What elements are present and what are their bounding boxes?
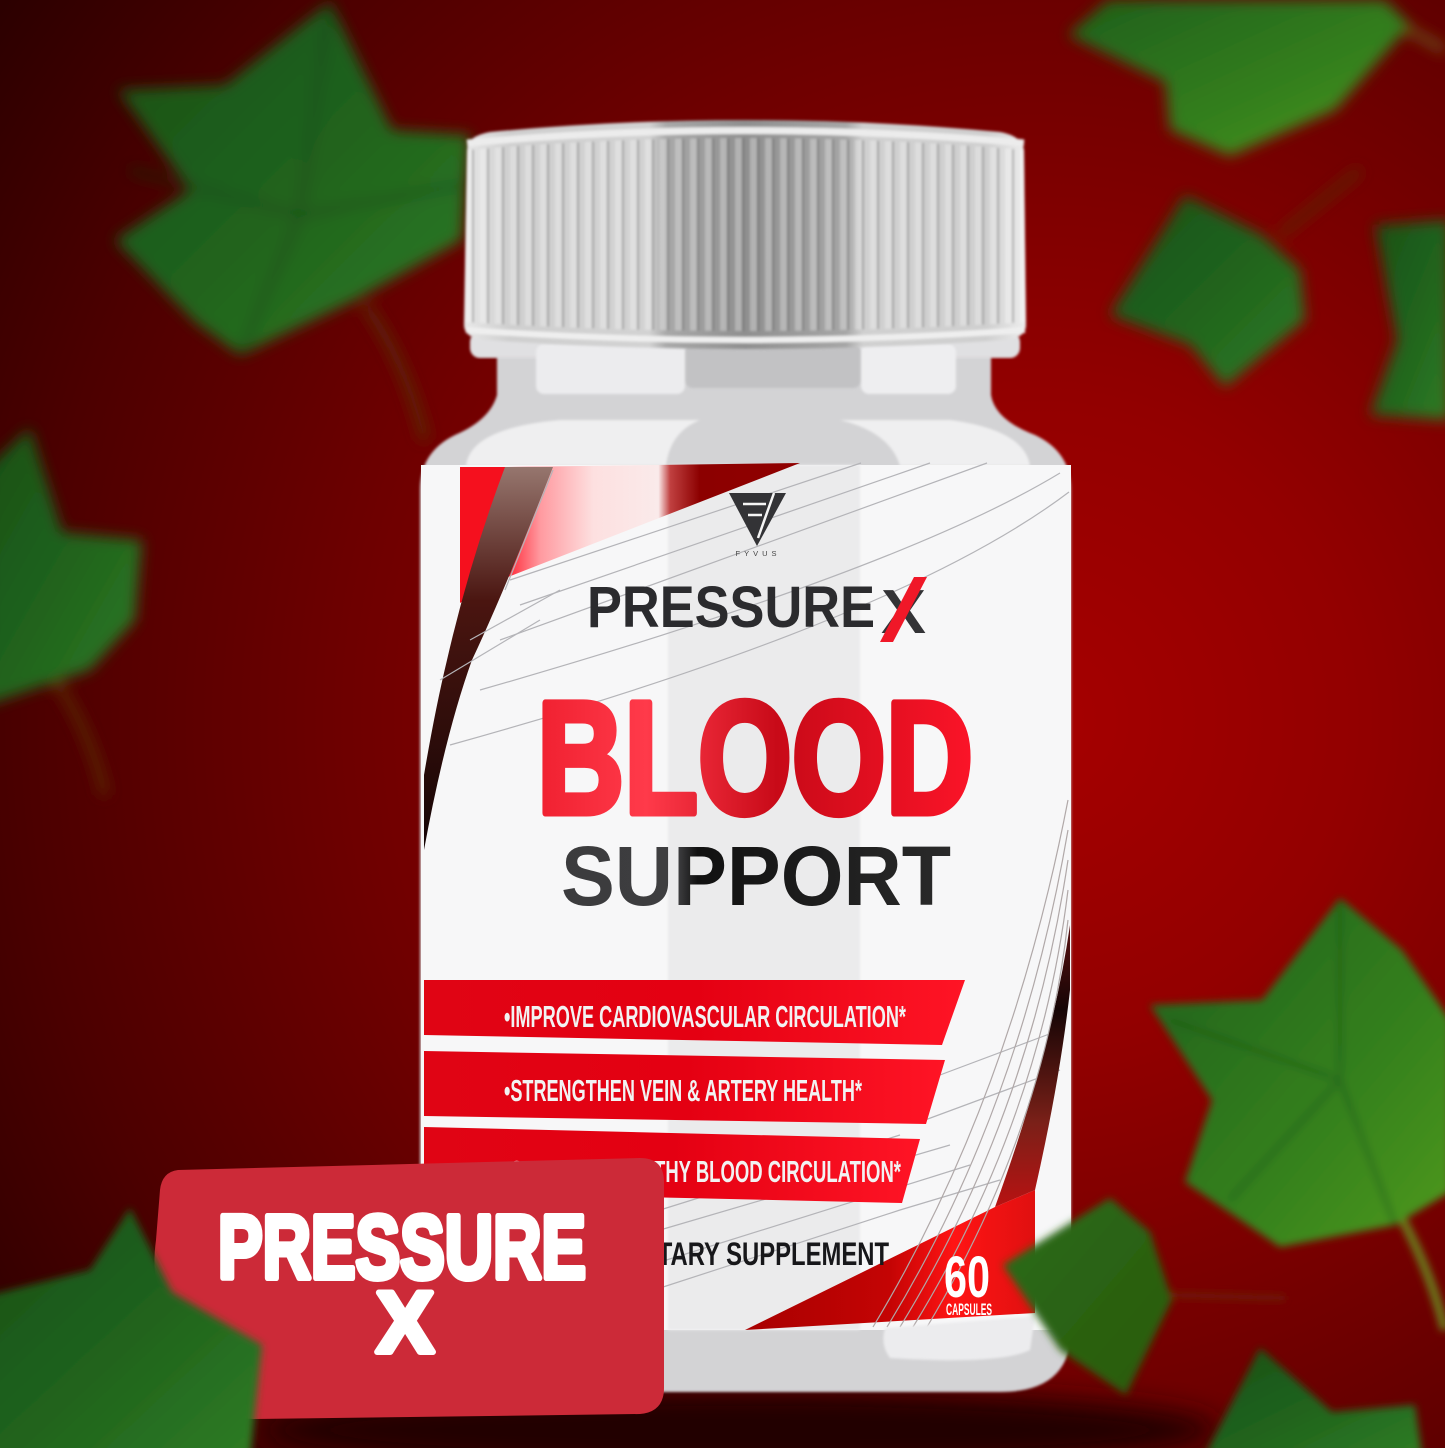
label top sheen wedge: [505, 463, 800, 577]
headline: blood: BLOOD: [537, 668, 973, 847]
leaf: bottom left: [0, 1208, 262, 1448]
brand name: PRESSURE: [587, 575, 875, 640]
dietary supplement line: DIETARY SUPPLEMENT: [618, 1236, 889, 1272]
shoulder highlights: [466, 420, 1030, 466]
neck highlights: [536, 344, 956, 394]
base highlight: [883, 1316, 1035, 1360]
leaf: bottom centre: [1003, 1198, 1285, 1395]
benefit bar 3: •SUPPORT HEALTHY BLOOD CIRCULATION*: [504, 1154, 902, 1189]
bottle: [420, 120, 1071, 1392]
bottle floor shadow: [260, 1390, 1220, 1448]
leaf: upper right: [1110, 170, 1360, 387]
sticker title line 2: X: [376, 1275, 434, 1371]
benefit bar 2: [424, 1051, 945, 1124]
label background: [421, 465, 1071, 1330]
label centre sheen: [668, 465, 860, 1330]
capsule count: 60: [944, 1245, 990, 1310]
bottle body: [420, 355, 1071, 1392]
sticker title line 1: PRESSURE: [218, 1198, 586, 1298]
bottom right red triangle: [745, 1190, 1035, 1330]
neck flange: [470, 332, 1020, 358]
leaf: bottom small: [1205, 1348, 1422, 1448]
bottom right grid lines: [873, 800, 1068, 1327]
leaf: right edge: [1370, 220, 1445, 420]
leaf: bottom right large: [1150, 898, 1445, 1330]
benefit bar 1: •IMPROVE CARDIOVASCULAR CIRCULATION*: [504, 999, 907, 1034]
brand name: X: [881, 578, 926, 647]
brand logo: [729, 493, 786, 558]
sticker: pressure x: [154, 1158, 664, 1419]
headline: support: SUPPORT: [561, 829, 951, 923]
capsule count: [944, 1245, 992, 1319]
right swoosh: [995, 925, 1070, 1207]
bottle cap: [464, 120, 1026, 349]
benefit bar 1: [424, 980, 965, 1045]
benefit bar 2: •STRENGTHEN VEIN & ARTERY HEALTH*: [504, 1073, 863, 1108]
label top red wedge: [460, 467, 510, 603]
leaf: left: [0, 428, 142, 795]
benefit bar 3: [424, 1127, 920, 1203]
leaf: top left: [115, 2, 470, 440]
label: CAPSULES: [946, 1300, 992, 1319]
label fine lines: [440, 463, 1069, 1288]
leaf: top right: [1068, 0, 1445, 156]
label: [421, 463, 1071, 1330]
left swoosh: [424, 467, 553, 850]
brand logo: FYVUS: [735, 549, 781, 558]
